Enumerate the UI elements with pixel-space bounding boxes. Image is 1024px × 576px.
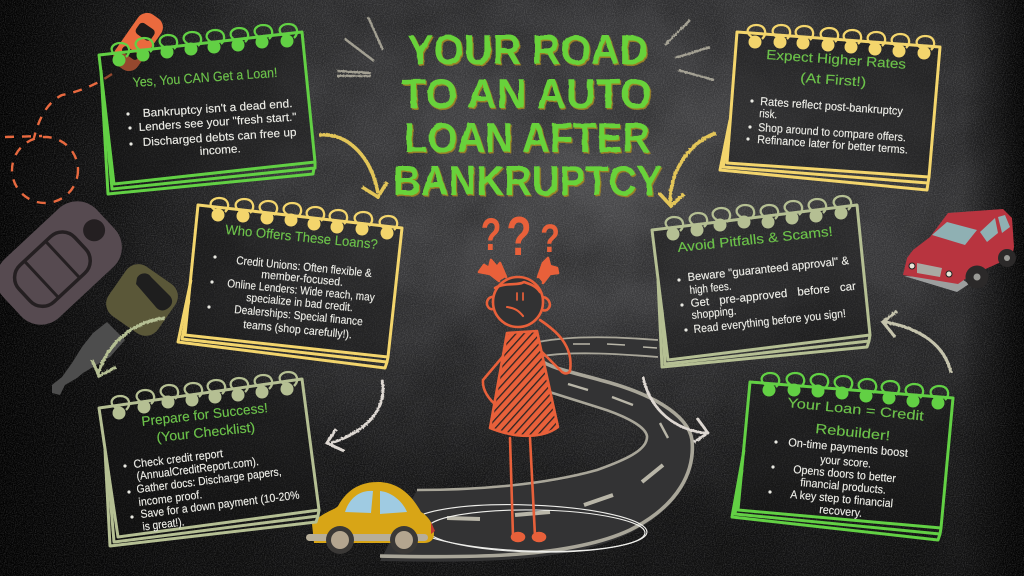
- white chalk ellipses on road: [410, 501, 648, 555]
- heading: [141, 400, 269, 445]
- bullet list: Save for a down payment (10-20%: [140, 490, 300, 521]
- notepad frame: [99, 372, 319, 546]
- question marks: [481, 206, 560, 267]
- bullet list: [746, 96, 908, 157]
- notepad frame: [178, 198, 402, 368]
- panel: expect higher rates: [720, 25, 940, 190]
- icon: red car: [903, 209, 1016, 292]
- title: LOAN AFTER: [404, 114, 650, 161]
- heading: Expect Higher Rates: [766, 47, 907, 72]
- bullet list: your score.: [820, 454, 872, 471]
- heading: Your Loan = Credit: [787, 395, 925, 424]
- bullet list: A key step to financial: [790, 489, 893, 510]
- panel: prepare for success checklist: [99, 372, 319, 546]
- bullet list: Read everything before you sign!: [693, 308, 846, 336]
- bullet list: Online Lenders: Wide reach, may: [227, 278, 375, 304]
- bullet list: Opens doors to better: [793, 464, 897, 485]
- panel: yes you can get a loan: [99, 24, 315, 194]
- feet: [512, 533, 545, 541]
- decorative chalk bursts around title: [337, 17, 714, 80]
- bullet list: Credit Unions: Often flexible &: [236, 255, 373, 280]
- icon: yellow car: [306, 482, 435, 554]
- arrow: who offers to checklist: [327, 380, 383, 451]
- ears: [487, 297, 550, 310]
- bullet list: recovery.: [819, 504, 863, 520]
- bullet list: Get pre-approved before car: [690, 281, 857, 310]
- question marks: ?: [481, 210, 501, 260]
- bullet list: [677, 255, 857, 336]
- heading: (Your Checklist): [156, 420, 256, 445]
- heading: Prepare for Success!: [141, 400, 269, 429]
- heading: Avoid Pitfalls & Scams!: [677, 224, 833, 255]
- character: confused stick girl: [479, 206, 571, 541]
- heading: Yes, You CAN Get a Loan!: [132, 65, 278, 90]
- panel: who offers these loans: [178, 198, 402, 368]
- notepad frame: [99, 24, 315, 194]
- bullet list: Rates reflect post-bankruptcy: [760, 96, 904, 118]
- bullet list: Gather docs: Discharge papers,: [136, 466, 282, 496]
- bullet list: (AnnualCreditReport.com).: [136, 456, 259, 483]
- bullet list: [123, 448, 300, 533]
- panel: avoid pitfalls and scams: [652, 196, 870, 367]
- icon: small orange car: [109, 9, 167, 75]
- bullet list: Bankruptcy isn't a dead end.: [142, 98, 293, 120]
- bullet list: financial products.: [800, 477, 886, 497]
- bullet list: Beware "guaranteed approval" &: [687, 255, 850, 284]
- bullet list: Dealerships: Special finance: [234, 304, 363, 328]
- bullet list: high fees.: [689, 281, 732, 297]
- panel: your loan equals credit rebuilder: [732, 373, 953, 540]
- bullet list: shopping.: [691, 305, 737, 322]
- notepad frame: [652, 196, 870, 367]
- title: TO AN AUTO: [401, 70, 652, 117]
- bullet list: [768, 437, 909, 520]
- arrow: road to credit rebuilder: [643, 377, 708, 442]
- right arm to chin: [535, 320, 571, 373]
- bullet list: risk.: [759, 108, 778, 121]
- heading: Rebuilder!: [815, 421, 891, 443]
- bullet list: On-time payments boost: [788, 437, 909, 460]
- pigtails: [479, 260, 506, 281]
- bullet list: Shop around to compare offers.: [758, 122, 906, 144]
- bullet list: income.: [199, 143, 241, 158]
- arrow: over the key: [92, 318, 165, 376]
- dress: [490, 331, 558, 436]
- bullet list: [126, 98, 297, 158]
- heading: [787, 395, 925, 443]
- head and face: [493, 277, 543, 327]
- heading: Who Offers These Loans?: [225, 222, 378, 252]
- arrow: green note to who offers: [319, 135, 387, 197]
- bullet list: income proof.: [138, 489, 203, 509]
- bullet list: member-focused.: [261, 269, 343, 289]
- icon: metal key: [52, 258, 184, 395]
- left arm: [483, 354, 505, 407]
- dashed route trail: [5, 74, 112, 203]
- bullet list: Check credit report: [133, 448, 224, 471]
- title: YOUR ROAD: [407, 26, 648, 73]
- bullet list: is great!).: [142, 516, 185, 533]
- arrow: higher rates to pitfalls: [659, 133, 716, 206]
- bullet list: Discharged debts can free up: [142, 127, 297, 149]
- legs: [510, 438, 535, 536]
- bullet list: teams (shop carefully!).: [243, 319, 352, 341]
- bullet list: specialize in bad credit.: [246, 292, 353, 314]
- question marks: ?: [540, 216, 560, 261]
- title: [393, 26, 662, 204]
- icon: car key fob: [0, 190, 133, 336]
- arrow: credit rebuilder to pitfalls: [883, 311, 951, 373]
- bullet list: [207, 255, 375, 341]
- notepad frame: [732, 373, 953, 540]
- notepad frame: [720, 25, 940, 190]
- bullet list: Refinance later for better terms.: [757, 134, 908, 157]
- heading: (At First!): [800, 70, 867, 90]
- question marks: ?: [506, 206, 532, 267]
- title: BANKRUPTCY: [393, 157, 662, 204]
- road: [380, 337, 694, 562]
- bullet list: Lenders see your "fresh start.": [138, 112, 297, 134]
- heading: [766, 47, 907, 90]
